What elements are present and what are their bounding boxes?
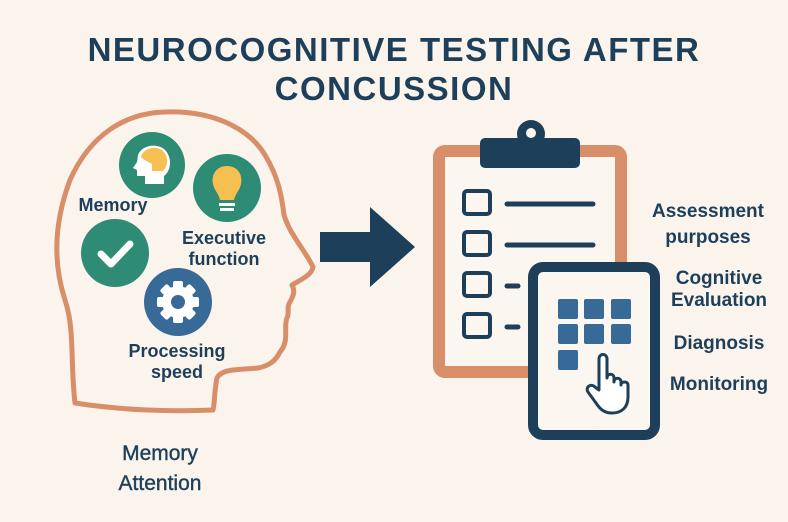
right labels: Diagnosis [674, 333, 764, 354]
label: memory attention: Memory [122, 442, 198, 465]
arrow [320, 207, 415, 287]
label: processing speed: Processing [128, 341, 226, 361]
right labels [652, 201, 768, 395]
right labels: Cognitive [676, 268, 762, 289]
label: memory attention: Attention [119, 472, 201, 495]
right labels: Monitoring [670, 374, 768, 395]
clipboard [439, 120, 621, 372]
label: executive function: Executive [182, 228, 266, 248]
title [88, 31, 700, 107]
label: memory: Memory [78, 195, 148, 215]
icon: checkmark [81, 219, 149, 287]
title: NEUROCOGNITIVE TESTING AFTER [88, 31, 700, 68]
right labels: Evaluation [671, 290, 767, 311]
right labels: Assessment [652, 201, 764, 222]
label: executive function: function [189, 249, 259, 269]
head outline [57, 112, 313, 411]
right labels: purposes [665, 227, 751, 248]
icon: pointing hand [587, 354, 628, 413]
icon: lightbulb [193, 154, 261, 222]
title: CONCUSSION [275, 70, 513, 107]
icon: gear [144, 268, 212, 336]
label: processing speed: speed [151, 362, 203, 382]
tablet [533, 267, 655, 435]
icon: memory head [119, 132, 185, 198]
